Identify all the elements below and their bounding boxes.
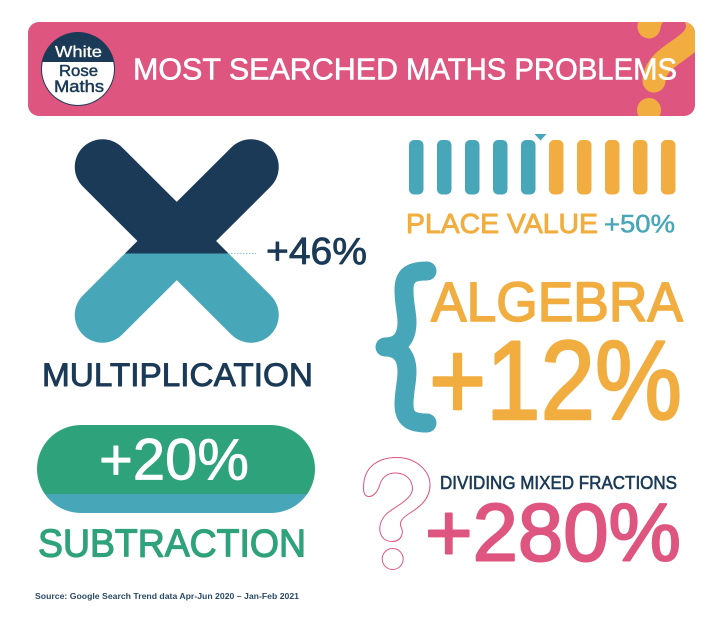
panel: algebra (385, 270, 684, 443)
dividing fractions value: +280% (425, 488, 681, 578)
title: MOST SEARCHED (133, 52, 398, 86)
dividing fractions label: DIVIDING MIXED FRACTIONS (440, 472, 677, 493)
source note: Source: Google Search Trend data Apr-Jun 2020 – Jan-Feb 2021 (35, 592, 300, 601)
icon: place value bars (409, 134, 676, 194)
icon: curly brace (385, 271, 427, 423)
title: MATHS PROBLEMS (406, 52, 677, 86)
subtraction label: SUBTRACTION (38, 522, 306, 566)
subtraction pill (37, 425, 315, 513)
multiplication value: +46% (266, 231, 367, 273)
panel: multiplication (42, 167, 367, 393)
logo: Rose (59, 63, 98, 80)
logo: Maths (54, 77, 104, 96)
algebra value: +12% (429, 318, 682, 443)
algebra label: ALGEBRA (431, 270, 684, 333)
logo (40, 32, 116, 108)
panel: place value (406, 134, 676, 239)
place value figure: +50% (604, 210, 675, 238)
place value label: PLACE VALUE (406, 208, 598, 239)
logo: White (55, 44, 102, 61)
panel: subtraction (37, 425, 315, 566)
icon: outline question mark (364, 458, 430, 570)
banner (28, 22, 695, 116)
subtraction value: +20% (99, 428, 249, 492)
multiplication label: MULTIPLICATION (42, 357, 313, 393)
panel: dividing mixed fractions (364, 458, 681, 578)
icon: multiplication cross (102, 167, 251, 315)
icon: banner question mark (637, 22, 695, 116)
